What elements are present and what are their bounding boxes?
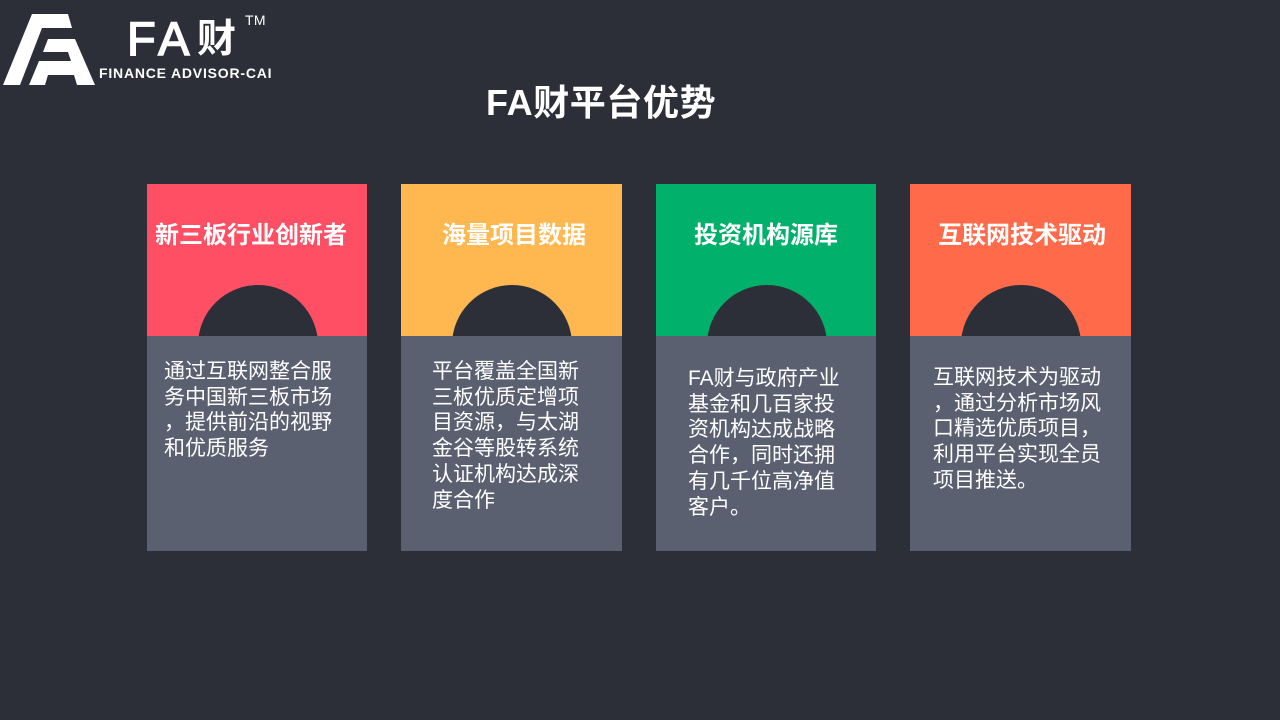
- title: FA财平台优势: [486, 82, 716, 123]
- panel header: [147, 184, 367, 336]
- body text: 客户。: [688, 496, 751, 519]
- logo tagline: FINANCE ADVISOR-CAI: [99, 65, 272, 81]
- body text: 互联网技术为驱动: [933, 366, 1101, 389]
- trademark: TM: [245, 12, 266, 28]
- heading: 新三板行业创新者: [155, 222, 347, 249]
- body text: 度合作: [432, 489, 495, 512]
- panel body: [910, 336, 1131, 551]
- panel: 互联网技术驱动: [910, 184, 1131, 551]
- logo: [3, 12, 272, 85]
- panel: 海量项目数据: [401, 184, 622, 551]
- body text: 认证机构达成深: [432, 463, 579, 486]
- body text: 通过互联网整合服: [164, 360, 332, 383]
- body text: ，通过分析市场风: [933, 392, 1101, 415]
- body text: 平台覆盖全国新: [432, 360, 579, 383]
- logo wordmark: [127, 12, 236, 65]
- semicircle: [198, 285, 318, 405]
- body text: [164, 360, 332, 460]
- body text: 项目推送。: [933, 469, 1038, 492]
- semicircle: [961, 285, 1081, 405]
- body text: 金谷等股转系统: [432, 437, 579, 460]
- body text: 合作，同时还拥: [688, 444, 835, 467]
- body text: 基金和几百家投: [688, 393, 835, 416]
- body text: ，提供前沿的视野: [164, 411, 332, 434]
- panel body: [147, 336, 367, 551]
- heading: 互联网技术驱动: [938, 222, 1106, 249]
- logo wordmark: 财: [197, 18, 236, 61]
- body text: 有几千位高净值: [688, 470, 835, 493]
- body text: [688, 366, 840, 519]
- panel body: [401, 336, 622, 551]
- heading: 投资机构源库: [694, 222, 838, 249]
- body text: 和优质服务: [164, 437, 269, 460]
- logo wordmark: FA: [127, 12, 194, 65]
- panel header: [910, 184, 1131, 336]
- panel: 新三板行业创新者: [147, 184, 367, 551]
- panel header: [656, 184, 876, 336]
- body text: 资机构达成战略: [688, 418, 835, 441]
- body text: 口精选优质项目，: [933, 417, 1101, 440]
- body text: 三板优质定增项: [432, 386, 579, 409]
- body text: [933, 366, 1101, 492]
- body text: [432, 360, 579, 512]
- panel: 投资机构源库: [656, 184, 876, 551]
- icon: FA logo mark: [3, 14, 95, 85]
- body text: FA财与政府产业: [688, 367, 840, 390]
- body text: 目资源，与太湖: [432, 411, 579, 434]
- heading: 海量项目数据: [442, 222, 586, 249]
- panel header: [401, 184, 622, 336]
- body text: 务中国新三板市场: [164, 386, 332, 409]
- body text: 利用平台实现全员: [933, 443, 1101, 466]
- panel body: [656, 336, 876, 551]
- semicircle: [452, 285, 572, 405]
- semicircle: [707, 285, 827, 405]
